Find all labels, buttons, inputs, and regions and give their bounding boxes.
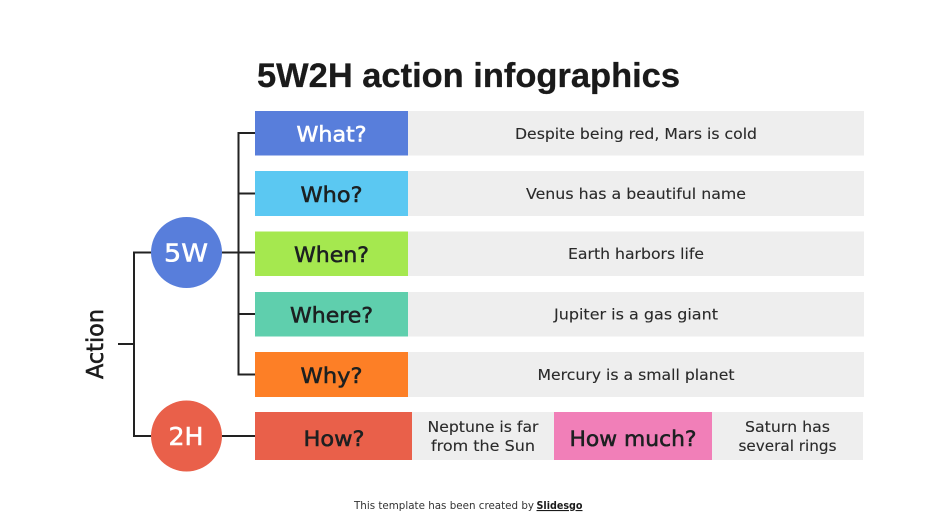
row: How and How much: Saturn has <box>745 418 830 436</box>
row: Where: Where? <box>290 304 373 328</box>
box: How much <box>554 412 712 460</box>
vertical label: Action: Action <box>83 309 109 379</box>
row: How and How much: Neptune is far <box>428 418 539 436</box>
row: Why: Why? <box>300 364 362 388</box>
row: How and How much <box>255 412 863 460</box>
row: Who: Who? <box>300 183 362 207</box>
title: 5W2H action infographics <box>257 57 680 95</box>
footer credit: This template has been created by <box>353 499 534 512</box>
connector lines <box>118 133 255 436</box>
row: Who <box>255 171 864 216</box>
row: When <box>255 232 864 276</box>
circle: 5W <box>151 217 222 288</box>
circle: 2H <box>151 400 222 472</box>
row: Why <box>255 352 864 397</box>
row: How and How much: How? <box>304 427 364 451</box>
row: When: Earth harbors life <box>568 245 704 263</box>
row: Where: Jupiter is a gas giant <box>553 306 718 324</box>
circle: 5W: 5W <box>164 238 208 268</box>
row: What: Despite being red, Mars is cold <box>515 125 757 143</box>
row: Who: Venus has a beautiful name <box>526 185 746 203</box>
row: How and How much: How much? <box>570 427 696 451</box>
row: Where <box>255 292 864 336</box>
box: How <box>255 412 412 460</box>
row: What <box>255 111 864 156</box>
row: When: When? <box>294 243 369 267</box>
row: How and How much: several rings <box>738 437 836 455</box>
row: Why: Mercury is a small planet <box>538 366 734 384</box>
footer credit: Slidesgo <box>536 499 583 512</box>
row: What: What? <box>296 122 366 146</box>
circle: 2H: 2H <box>168 422 204 451</box>
row: How and How much: from the Sun <box>431 437 535 455</box>
